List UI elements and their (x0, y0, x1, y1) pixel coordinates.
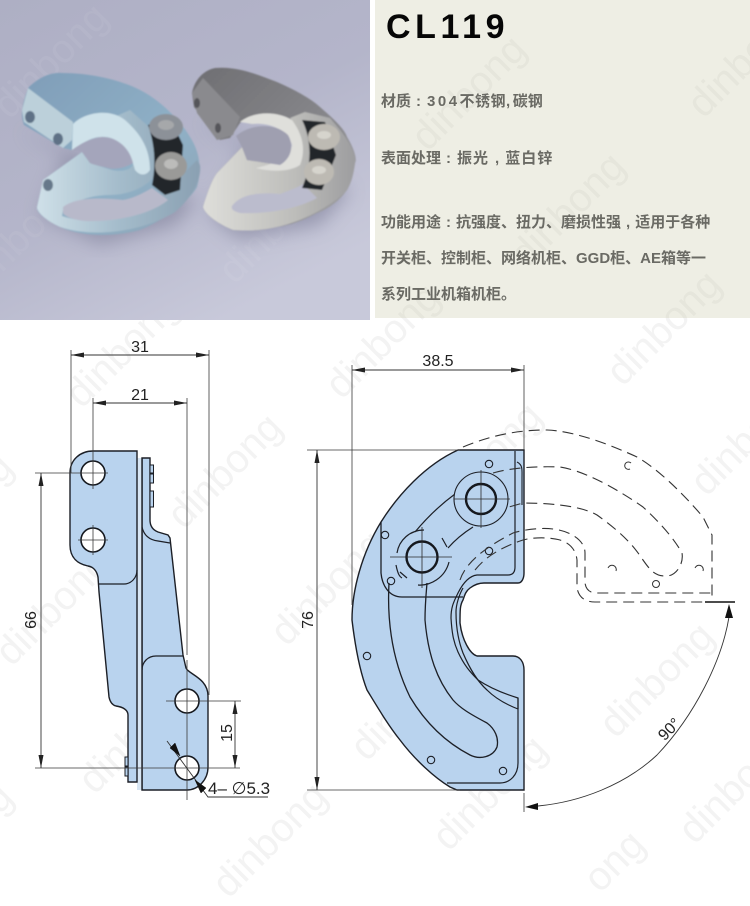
front view drawing (300, 353, 735, 812)
product photo (0, 0, 370, 320)
specification panel (375, 0, 750, 318)
lugs (125, 465, 154, 776)
inner plate lines (447, 451, 518, 783)
hole callout: 4– ∅5.3 (208, 779, 270, 798)
watermarks: dinbong (419, 394, 551, 526)
surface treatment: 表面处理 : 振光 , 蓝白锌 (381, 150, 553, 167)
upper roller (454, 470, 510, 528)
watermarks: dinbong (204, 774, 336, 906)
watermarks: dinbong (591, 614, 723, 746)
lower bracket and strip (142, 458, 208, 790)
watermarks: dinbong (57, 284, 189, 416)
material: 材质 : 304不锈钢,碳钢 (381, 93, 543, 110)
watermarks: dinbong (70, 670, 202, 802)
dimension 66: 66 (23, 611, 40, 629)
panel watermarks: dinbong (403, 27, 535, 159)
connecting web (137, 458, 142, 790)
dimension 15: 15 (219, 724, 236, 742)
watermarks: dinbong (159, 405, 291, 537)
panel watermarks: dinbong (502, 144, 634, 276)
function and use line 3: 系列工业机箱机柜。 (381, 286, 516, 303)
title: CL119 (386, 8, 509, 46)
rotation angle 90 degrees: 90° (655, 715, 684, 744)
dimension 31 (71, 339, 209, 356)
centre lines (35, 350, 241, 800)
shadows (20, 120, 350, 245)
watermarks: ong (575, 822, 654, 900)
function and use: 功能用途 : 抗强度、扭力、磨损性强 , 适用于各种 (381, 214, 710, 231)
function and use line 2: 开关柜、控制柜、网络机柜、GGD柜、AE箱等一 (381, 250, 706, 267)
watermarks: dinbong (598, 262, 730, 394)
blue zinc hinge (22, 73, 200, 235)
dimension 21: 21 (131, 387, 149, 404)
photo watermarks (0, 0, 342, 302)
dimension 76: 76 (300, 611, 317, 629)
rotated position dashed outline (460, 430, 712, 602)
dimension 21 (93, 387, 187, 404)
curved slot (389, 583, 498, 757)
small rivets (363, 460, 507, 775)
panel watermarks (375, 0, 750, 318)
hinge body (352, 450, 524, 790)
dimension 15 (219, 701, 236, 768)
watermarks: dinbong (424, 727, 556, 859)
rotation angle 90 degrees (525, 602, 735, 810)
photo watermarks: dinbong (210, 160, 342, 292)
hole callout (167, 741, 270, 798)
watermarks: dinbong (262, 522, 394, 654)
upper bracket (70, 451, 137, 782)
holes (81, 461, 199, 780)
silver hinge (192, 68, 356, 231)
watermarks: dinbong (317, 275, 449, 407)
lower roller (390, 527, 452, 588)
dimension 38.5: 38.5 (422, 353, 454, 370)
watermarks: dinbong (342, 637, 474, 769)
side view drawing (23, 340, 270, 800)
dimension 38.5 (307, 353, 524, 812)
dashed rivets (608, 462, 703, 588)
